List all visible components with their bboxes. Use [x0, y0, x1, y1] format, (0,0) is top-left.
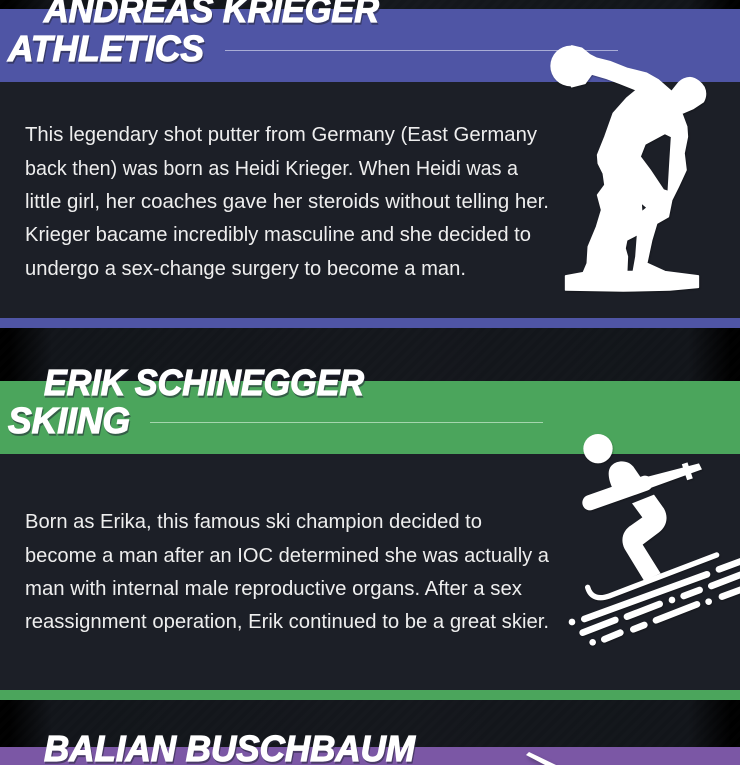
body text: Erik Schinegger	[25, 511, 550, 633]
panel: Balian Buschbaum, cut off at the bottom	[0, 728, 740, 765]
footer band: athletics	[0, 318, 740, 328]
athlete name: Erik Schinegger: ERIK SCHINEGGER	[44, 362, 364, 403]
body text: Andreas Krieger	[25, 124, 549, 280]
icon: discus thrower statue	[550, 46, 705, 291]
header band: athletics	[0, 9, 740, 82]
body text: Andreas Krieger: Krieger bacame incredibly masculine and she decided to	[25, 224, 531, 246]
icon: skier	[569, 434, 740, 646]
body text: Andreas Krieger: little girl, her coaches gave her steroids without telling her.	[25, 191, 549, 213]
body text: Erik Schinegger: Born as Erika, this famous ski champion decided to	[25, 511, 482, 533]
header band: skiing	[0, 381, 740, 454]
body text: Andreas Krieger: back then) was born as Heidi Krieger. When Heidi was a	[25, 158, 519, 180]
text panel background: athletics	[0, 82, 740, 318]
sport heading: Skiing: SKIING	[8, 400, 130, 441]
icon: partial white shape	[526, 752, 556, 765]
panel: Erik Schinegger, skiing	[0, 362, 740, 700]
body text: Andreas Krieger: undergo a sex-change surgery to become a man.	[25, 258, 466, 280]
header band: Balian Buschbaum	[0, 747, 740, 765]
body text: Erik Schinegger: reassignment operation, Erik continued to be a great skier.	[25, 611, 549, 633]
sport heading: Athletics: ATHLETICS	[7, 28, 204, 69]
body text: Erik Schinegger: man with internal male reproductive organs. After a sex	[25, 578, 522, 600]
footer band: skiing	[0, 690, 740, 700]
body text: Erik Schinegger: become a man after an IOC determined she was actually a	[25, 545, 550, 567]
body text: Andreas Krieger: This legendary shot putter from Germany (East Germany	[25, 124, 537, 146]
text panel background: skiing	[0, 454, 740, 690]
panel: Andreas Krieger, athletics	[0, 0, 740, 328]
